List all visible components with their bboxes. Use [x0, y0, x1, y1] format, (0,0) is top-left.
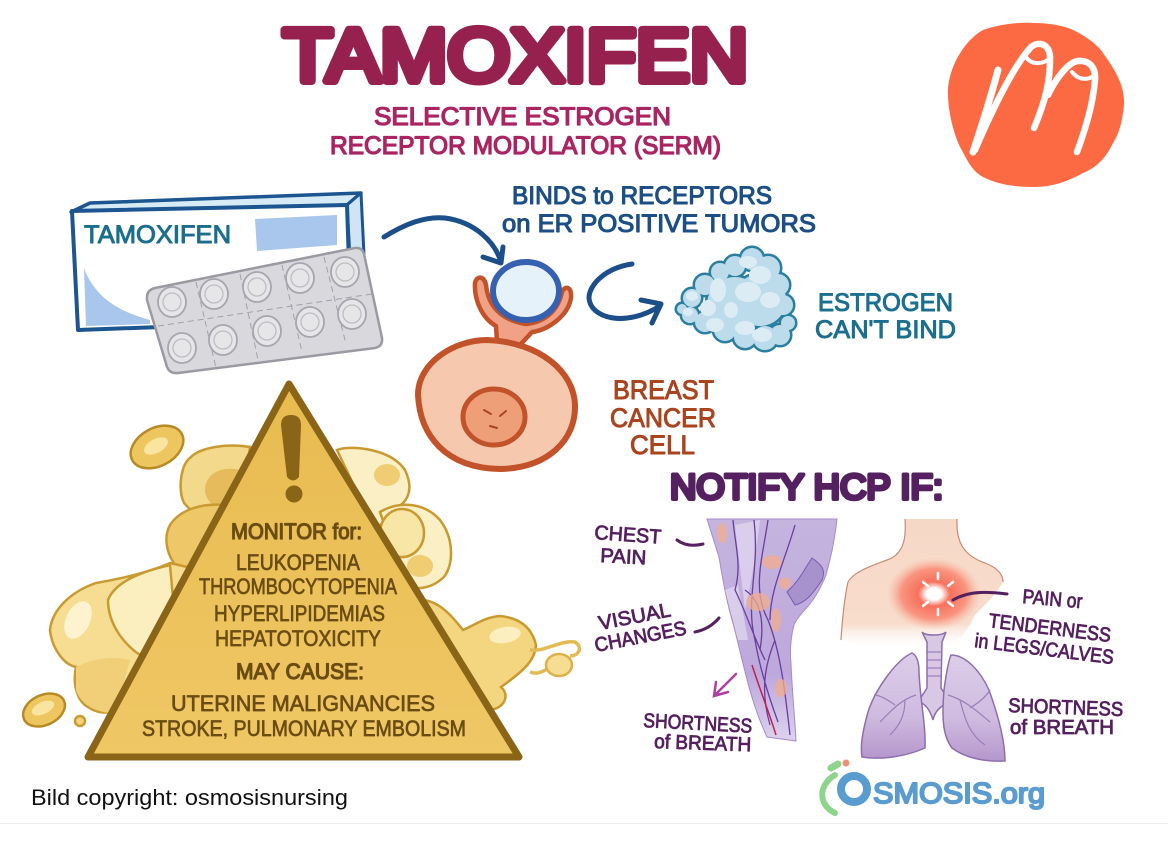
title: TAMOXIFEN: [283, 14, 748, 97]
subtitle: RECEPTOR MODULATOR (SERM): [330, 132, 721, 160]
monitor text: THROMBOCYTOPENIA: [199, 574, 397, 599]
icon: exclamation mark: [281, 415, 302, 502]
notify labels: leg: SHORTNESS: [643, 710, 753, 738]
warning triangle: [88, 384, 519, 757]
notify labels: leg: CHEST: [594, 522, 662, 549]
copyright caption: Bild copyright: osmosisnursing: [31, 785, 348, 810]
icon: medication box: TAMOXIFEN: [84, 221, 231, 249]
notify labels: leg: [593, 522, 753, 756]
arrow: drug to receptor: [384, 218, 503, 263]
monitor text: [142, 519, 466, 741]
notify labels: leg: CHANGES: [593, 618, 688, 657]
monitor text: UTERINE MALIGNANCIES: [171, 691, 435, 716]
notify labels: chest: [973, 586, 1115, 669]
label: breast cancer cell: CANCER: [610, 403, 716, 433]
subtitle: SELECTIVE ESTROGEN: [374, 103, 671, 131]
icon: estrogen cluster: [677, 248, 795, 350]
icon: orange logo: [948, 23, 1124, 187]
label: estrogen can't bind: ESTROGEN: [818, 289, 953, 317]
monitor text: STROKE, PULMONARY EMBOLISM: [142, 716, 466, 741]
monitor text: HYPERLIPIDEMIAS: [214, 601, 385, 626]
arrow: curved to estrogen: [589, 264, 661, 323]
icon: leg with veins: [707, 519, 837, 741]
binds text: on ER POSITIVE TUMORS: [502, 210, 816, 238]
heading: notify HCP: NOTIFY HCP IF:: [670, 468, 943, 507]
binds text: [502, 182, 816, 238]
notify labels: leg: of BREATH: [654, 731, 752, 756]
notify labels: chest: in LEGS/CALVES: [973, 630, 1115, 669]
monitor text: LEUKOPENIA: [236, 550, 360, 575]
label: breast cancer cell: CELL: [630, 430, 695, 460]
label: estrogen can't bind: CAN'T BIND: [815, 316, 956, 344]
label: breast cancer cell: [610, 375, 716, 460]
monitor text: MAY CAUSE:: [236, 659, 364, 684]
notify labels: leg: PAIN: [600, 545, 647, 569]
monitor text: MONITOR for:: [231, 519, 362, 544]
label: breast cancer cell: BREAST: [613, 375, 714, 405]
icon: breast cancer cell: [418, 262, 575, 469]
label: shortness of breath right: of BREATH: [1010, 717, 1114, 739]
label: shortness of breath right: SHORTNESS: [1008, 695, 1124, 721]
icon: chest with pain: [841, 519, 1007, 650]
notify labels: chest: PAIN or: [1022, 586, 1084, 613]
label: estrogen can't bind: [815, 289, 956, 344]
subtitle: [330, 103, 721, 160]
label: shortness of breath right: [1008, 695, 1124, 739]
notify labels: leg: VISUAL: [597, 599, 673, 635]
binds text: BINDS to RECEPTORS: [512, 182, 772, 210]
pointer strokes and small arrow: [677, 540, 736, 696]
monitor text: HEPATOTOXICITY: [215, 626, 381, 651]
icon: blister pack: [147, 248, 382, 373]
logo: osmosis.org: SMOSIS.org: [873, 778, 1045, 810]
notify labels: chest: TENDERNESS: [987, 610, 1112, 647]
logo: osmosis.org: [822, 760, 1045, 813]
icon: fat cells background: [18, 417, 579, 733]
icon: lungs and trachea: [861, 632, 1005, 761]
icon: medication box: [71, 193, 364, 330]
